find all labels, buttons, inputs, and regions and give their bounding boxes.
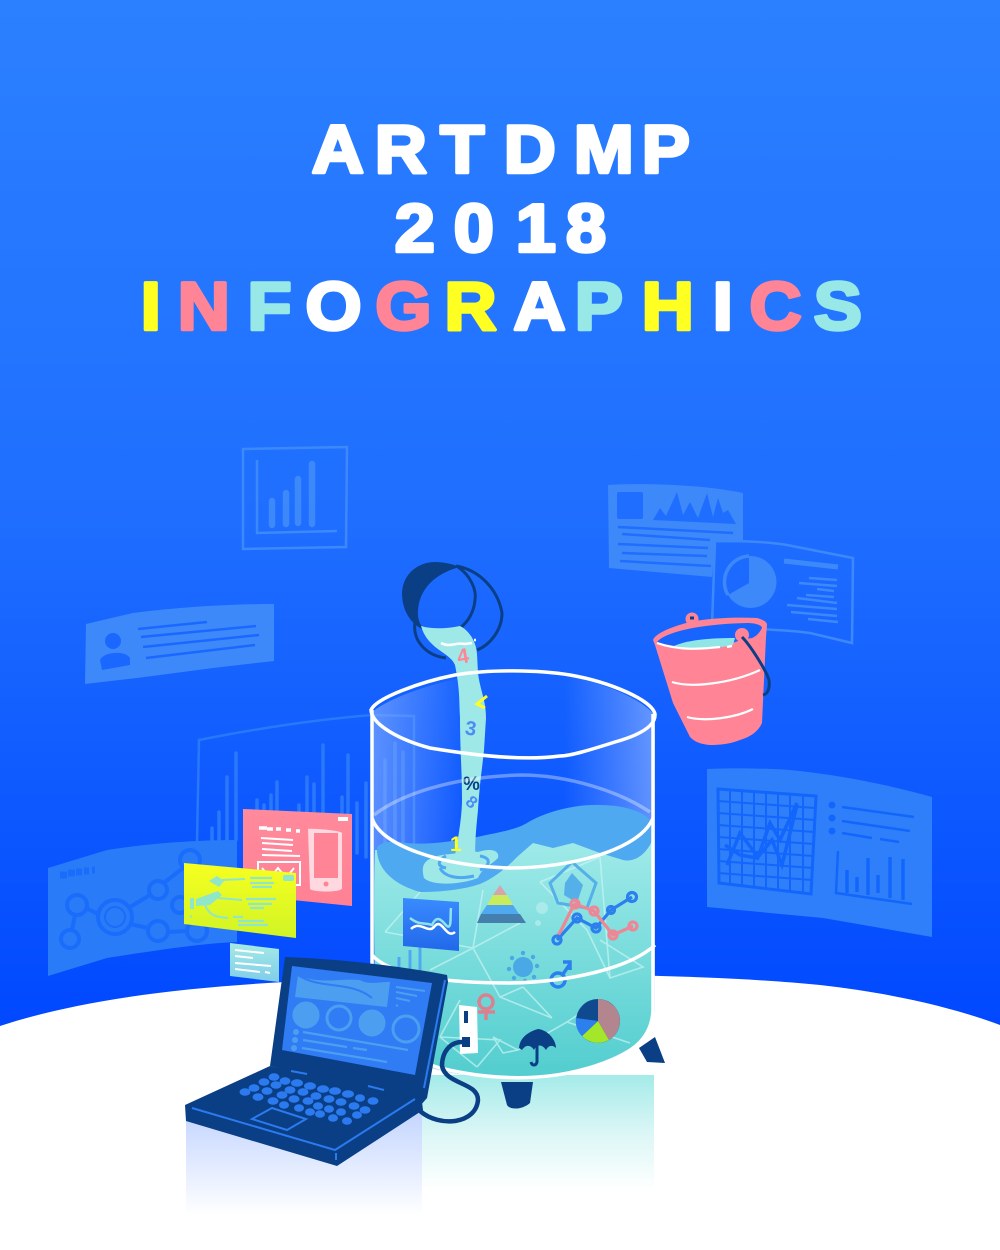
liquid surface	[377, 805, 653, 892]
title line: INFOGRAPHICS: S	[814, 268, 862, 344]
title line: INFOGRAPHICS: R	[444, 268, 497, 344]
mini bars in liquid	[399, 945, 420, 990]
ghost panel: pie chart document	[712, 541, 853, 643]
title line: INFOGRAPHICS: I	[713, 268, 733, 344]
ghost panel: profile card	[85, 604, 274, 684]
icon: pyramid	[477, 885, 526, 923]
icon: power outlet	[459, 1005, 478, 1054]
lower ring	[372, 945, 655, 983]
background ghost panels	[48, 447, 932, 976]
title line: INFOGRAPHICS: I	[141, 268, 161, 344]
icon: umbrella	[519, 1029, 556, 1065]
bucket water	[672, 638, 735, 649]
percent sign: %	[463, 774, 480, 795]
title line: 2018: 2018	[395, 190, 606, 266]
number 1: 1	[450, 833, 462, 856]
ghost panel: tall bar chart	[197, 715, 414, 880]
ghost panel: grid chart and bars	[707, 768, 932, 937]
ghost panel: network diagram	[48, 840, 237, 976]
icon: sun	[507, 951, 539, 983]
icon: line chart card	[403, 898, 459, 951]
pie chart	[576, 999, 620, 1043]
icon: male symbol	[551, 962, 570, 987]
laptop display	[282, 966, 432, 1075]
title line: INFOGRAPHICS: C	[750, 268, 802, 344]
back water ring	[374, 775, 650, 815]
water stream with numbers	[421, 626, 487, 866]
laptop edge highlights	[192, 980, 445, 1160]
liquid	[374, 805, 654, 1078]
reflection of beaker on table	[422, 1075, 654, 1190]
reflection of laptop on table	[186, 1110, 422, 1215]
floating yellow card	[184, 863, 296, 938]
laptop trackpad	[252, 1108, 306, 1130]
stream highlight	[441, 640, 476, 645]
liquid body	[374, 825, 654, 1078]
ghost panel: area chart document	[608, 484, 743, 577]
title line: INFOGRAPHICS: O	[305, 268, 362, 344]
title line: INFOGRAPHICS: G	[375, 268, 431, 344]
stream	[421, 626, 486, 866]
faint bubbles	[535, 902, 548, 926]
title line: INFOGRAPHICS: H	[642, 268, 694, 344]
bucket body	[653, 618, 767, 745]
bucket handle	[690, 618, 769, 695]
laptop	[185, 957, 448, 1166]
glass beaker outlines	[371, 671, 655, 1078]
title line: INFOGRAPHICS: A	[513, 268, 566, 344]
laptop keyboard	[240, 1073, 378, 1125]
symbol: less than	[477, 696, 487, 708]
bucket knobs	[686, 612, 698, 626]
bucket inner opening	[657, 623, 762, 647]
pink bucket	[653, 612, 769, 745]
laptop display area chart	[295, 975, 390, 1007]
power cable	[420, 1042, 478, 1121]
floating small text card	[230, 943, 279, 982]
number 8: 8	[462, 792, 481, 813]
number 3: 3	[464, 717, 478, 741]
laptop screen lid	[270, 957, 448, 1106]
number 4: 4	[455, 644, 471, 669]
laptop display dials	[293, 1002, 419, 1042]
title line: ARTDMP: ARTDMP	[312, 111, 690, 187]
title line: INFOGRAPHICS: F	[248, 268, 292, 344]
white table surface	[0, 975, 1000, 1250]
dark bucket pouring	[402, 562, 502, 658]
laptop display text rows	[291, 1029, 408, 1062]
icon: female symbol	[478, 995, 495, 1020]
liquid splash	[423, 850, 498, 884]
bottom curve and sides	[372, 710, 653, 1078]
ghost panel: bar chart frame	[243, 447, 347, 549]
top rim	[371, 671, 655, 758]
beaker feet	[501, 1037, 665, 1109]
line chart with markers	[553, 892, 637, 944]
title	[141, 111, 862, 344]
icon: hexagon gem	[550, 862, 596, 908]
floating pink card	[243, 809, 352, 906]
front water ring	[372, 818, 653, 868]
bucket rim and bands	[657, 643, 760, 719]
title line: INFOGRAPHICS: N	[178, 268, 230, 344]
title line: INFOGRAPHICS: P	[575, 268, 623, 344]
network lines in liquid	[385, 857, 643, 1067]
glass beaker back and sheen	[372, 671, 655, 1079]
laptop base	[185, 1066, 423, 1166]
laptop speaker marks	[291, 1071, 384, 1090]
